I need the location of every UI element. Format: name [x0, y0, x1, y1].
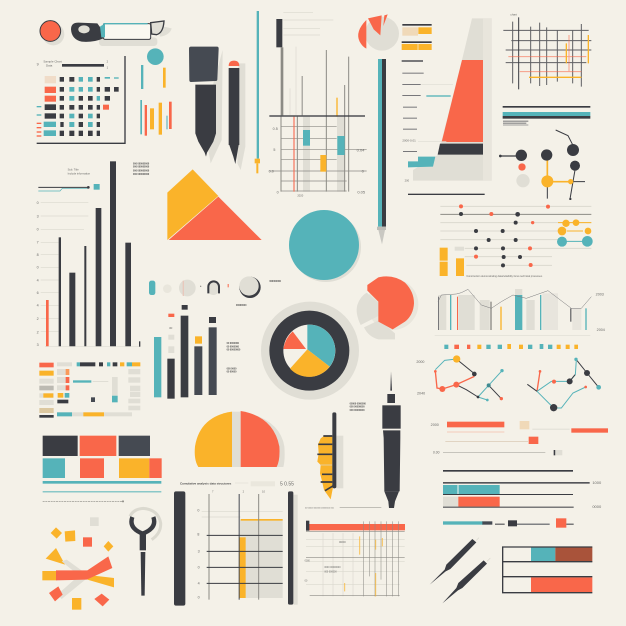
grid chart axis labels: [269, 127, 366, 198]
text block: caption beside triangle: 000 000000000: [133, 174, 150, 176]
bars: red progress rows: 0.00: [433, 451, 440, 455]
chart: donut pie: [261, 302, 359, 400]
icon: confetti burst: [42, 517, 114, 610]
grid chart title: 5 0.55: [280, 481, 294, 487]
panel: slim column chart: [154, 305, 241, 399]
row value labels: 1000: [592, 480, 602, 485]
chart: small pie: [358, 14, 399, 51]
table heading: 9: [37, 62, 39, 66]
row value labels: 0000: [592, 504, 602, 509]
grid chart axis labels: 0.0: [269, 170, 274, 174]
table chart labels: 0000 00000000: [324, 567, 341, 569]
bar chart grid and labels: 8: [37, 253, 39, 257]
grid chart axis labels: 0: [277, 190, 279, 194]
bar chart legend text: Include information: [68, 172, 91, 176]
caption under dial: 00000000: [236, 305, 247, 307]
bar chart grid and labels: 2: [37, 330, 39, 334]
bar chart grid and labels: 3: [37, 343, 39, 347]
chart: teal circle: [289, 210, 361, 282]
lower grid labels: 2: [243, 489, 245, 493]
chart: red blob pie: [357, 276, 418, 339]
table chart labels: 00: [305, 580, 308, 582]
text block: caption beside triangle: [133, 163, 150, 176]
panel: heat table: [37, 56, 125, 143]
bar chart grid and labels: [37, 201, 88, 347]
column notes: 00 00000: [227, 372, 237, 374]
column notes: 00 0000000: [227, 346, 240, 348]
table heading: Sample Chart: [43, 60, 62, 64]
table header swatches: [77, 362, 140, 366]
icon: diagonal pen two: [442, 558, 490, 603]
grid chart axis labels: 5: [273, 148, 275, 152]
pen caption: [350, 403, 367, 412]
table heading: 1: [107, 65, 109, 69]
bar chart grid and labels: 3: [37, 214, 39, 218]
icon: diagonal pen one: [430, 538, 479, 585]
table chart labels: 0000: [305, 560, 311, 562]
chart: split dome: [195, 411, 285, 467]
panel: tall bar chart: [37, 161, 140, 347]
grid chart axis labels: 0.5: [273, 127, 278, 131]
grid chart title: Cumulative analysis data structures: [180, 481, 232, 485]
chart: node network: [499, 130, 585, 200]
grid chart axis labels: 0: [362, 169, 365, 174]
bar chart grid and labels: 0: [37, 266, 39, 270]
slider row: [443, 518, 574, 528]
table mid progress: [73, 377, 118, 402]
network labels: 2040: [417, 392, 425, 396]
lower grid labels: [197, 489, 265, 600]
chart: tall trapezoid: [402, 18, 492, 195]
text block: caption beside triangle: 000 000000000: [133, 163, 150, 165]
bar chart grid and labels: 2: [37, 317, 39, 321]
lower grid labels: 0: [198, 596, 200, 600]
bar chart legend text: Sub. Title: [68, 168, 79, 172]
table chart labels: 0000: [339, 540, 346, 544]
legend: colored squares: [444, 344, 578, 349]
dot lines caption: Construction demonstrating data/reliability focus technical processes: [466, 275, 543, 278]
trapezoid side labels: [402, 73, 453, 182]
table chart caption: 00 00000 000000 00000000 000: [305, 508, 335, 510]
bar chart grid and labels: 6: [37, 291, 39, 295]
grid title: chart: [510, 12, 517, 16]
grid chart axis labels: 0.04: [357, 148, 365, 153]
pen caption: 00000 0000000: [350, 403, 367, 405]
column notes: 000 0000: [227, 369, 237, 371]
line chart year labels: 2003: [596, 293, 604, 297]
icon: teal rule: [255, 11, 260, 173]
trapezoid side labels: 200: [405, 178, 410, 182]
table heading: 2: [107, 59, 109, 63]
grid chart axis labels: 2020: [297, 194, 304, 198]
table right cells: [128, 369, 140, 410]
table heading: [37, 59, 109, 69]
icon: teal vertical pen: [377, 59, 386, 244]
bars: horizontal stacked rows: [443, 470, 602, 509]
icon: yellow and red triangle: [167, 169, 262, 240]
panel: color table: [39, 362, 140, 418]
bar chart grid and labels: 0: [37, 201, 39, 205]
bars: striped band: [503, 106, 590, 125]
lower grid labels: 0: [197, 509, 199, 513]
table chart labels: [305, 540, 346, 582]
panel: lower table chart: [305, 507, 405, 596]
bar chart grid and labels: 7: [37, 241, 39, 245]
icon: brush: [317, 412, 343, 499]
table heading: Data: [46, 64, 53, 68]
dial caption: 000000000: [269, 281, 282, 283]
network labels: [416, 360, 425, 396]
bars: red progress rows: 2000: [431, 423, 439, 427]
line chart year labels: 2004: [597, 328, 605, 332]
lower grid labels: 3: [198, 550, 200, 554]
small colored bars with circle: [140, 48, 172, 136]
chart: stacked box: [503, 547, 592, 593]
panel: lower grid chart: [174, 481, 298, 606]
lower grid labels: 10: [262, 489, 265, 493]
band caption: [503, 121, 528, 125]
column notes: 00 0000000: [227, 343, 240, 345]
lower grid labels: 4: [198, 581, 200, 585]
chart: right network: [527, 358, 601, 411]
column tags: 30: [169, 326, 173, 330]
icon: marker pen: [189, 47, 223, 163]
pen caption: 000 00000000: [350, 410, 365, 412]
column notes: [227, 343, 241, 374]
panel: center grid chart: [269, 13, 367, 198]
grid chart title: [180, 481, 294, 487]
lower grid labels: 8: [197, 533, 199, 537]
table row labels: [37, 76, 56, 137]
bar chart grid and labels: 0: [37, 228, 39, 232]
chart: bars with line: [435, 289, 605, 336]
panel: stacked reference block: [402, 24, 432, 62]
bars: red progress rows: [431, 421, 608, 455]
table cells: [60, 77, 119, 136]
lower grid labels: 0: [198, 566, 200, 570]
second table column: [57, 362, 72, 403]
row value labels: [592, 480, 602, 509]
lower grid labels: 7: [212, 489, 214, 493]
pen caption: 000 00000000: [350, 407, 365, 409]
table chart labels: 000 000000: [324, 571, 337, 573]
icon: slim pen: [229, 61, 245, 170]
icon: glasses: [71, 21, 172, 46]
chart: left network: [416, 355, 504, 401]
bar chart grid and labels: 4: [37, 304, 39, 308]
chart: dot lines: [440, 204, 593, 278]
text block: caption beside triangle: 000 000000000: [133, 167, 150, 169]
icon: large pen: [350, 371, 401, 508]
icon: magnifier key: [130, 508, 161, 596]
table bottom band: [57, 412, 132, 416]
line chart year labels: [596, 293, 605, 332]
icon row: pill, discs and dial: [149, 276, 282, 298]
bar chart legend text: [38, 168, 100, 191]
grid chart axis labels: 0.05: [357, 189, 366, 194]
bar chart grid and labels: 4: [37, 278, 39, 282]
panel: color blocks: [43, 436, 162, 502]
column notes: 00 00000000: [227, 350, 241, 352]
trapezoid side labels: 2000-0.01: [402, 138, 416, 142]
text block: caption beside triangle: 000 000000000: [133, 170, 150, 172]
icon: red circle: [40, 21, 64, 45]
panel: top right grid: [503, 12, 591, 89]
network labels: 2000: [416, 360, 424, 364]
